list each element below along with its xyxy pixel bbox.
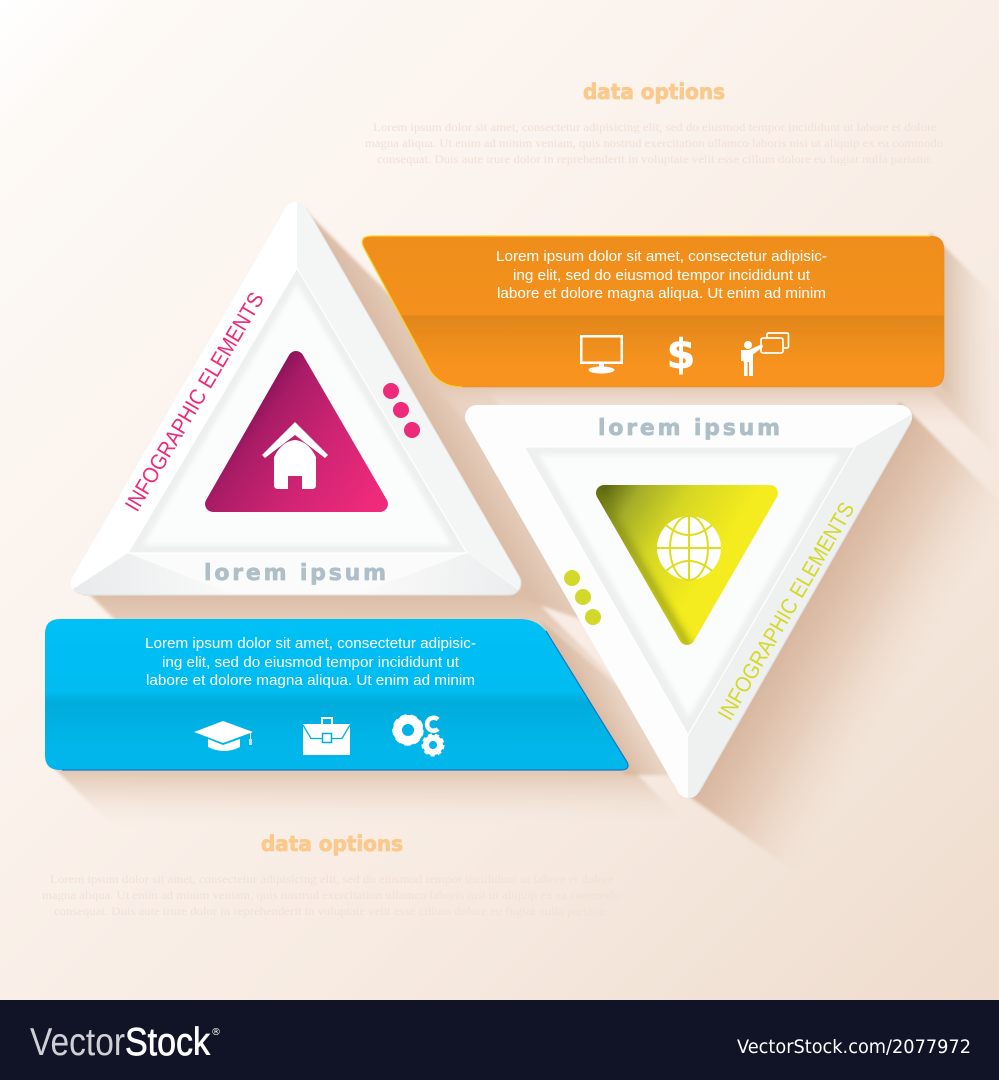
blue banner text: labore et dolore magna aliqua. Ut enim ad minim — [146, 672, 475, 689]
paragraph top: magna aliqua. Ut enim ad minim veniam, quis nostrud exercitation ullamco laboris nisi ut aliquip ex ea commodo — [365, 136, 943, 150]
icon: gears — [394, 716, 443, 755]
footer logo stock: Stock — [125, 1021, 210, 1064]
top text block — [365, 80, 943, 166]
paragraph bottom — [42, 872, 621, 918]
heading: data options top: data options — [583, 80, 725, 104]
icon: globe — [657, 516, 721, 580]
blue banner text: ing elit, sed do eiusmod tempor incididunt ut — [162, 654, 460, 671]
green dots — [564, 570, 601, 625]
inner plateau — [539, 455, 840, 717]
icon: graduation cap — [194, 721, 253, 751]
triangle body — [465, 405, 912, 798]
long shadows — [48, 205, 999, 900]
triangle body — [71, 202, 521, 595]
label: infographic elements pink: INFOGRAPHIC ELEMENTS — [120, 288, 269, 516]
paragraph bottom: consequat. Duis aute irure dolor in reprehenderit in voluptate velit esse cillum dolore eu fugiat nulla pariatur. — [54, 904, 609, 918]
orange banner text — [496, 248, 827, 302]
panel: orange banner — [362, 236, 944, 387]
footer url: VectorStock.com/2077972 — [737, 1036, 971, 1058]
footer logo vector: Vector — [30, 1021, 125, 1064]
orange banner text: labore et dolore magna aliqua. Ut enim ad minim — [497, 285, 826, 302]
paragraph bottom: magna aliqua. Ut enim ad minim veniam, quis nostrud exercitation ullamco laboris nisi ut aliquip ex ea commodo — [42, 888, 621, 902]
paragraph top: Lorem ipsum dolor sit amet, consectetur adipisicing elit, sed do eiusmod tempor incididunt ut labore et dolore — [373, 120, 937, 134]
panel: yellow triangle — [465, 405, 930, 815]
pink dots — [383, 383, 420, 438]
paragraph top — [365, 120, 943, 166]
footer bar — [0, 1000, 999, 1080]
magenta window — [205, 351, 388, 512]
blue banner text — [145, 635, 476, 689]
orange banner text: ing elit, sed do eiusmod tempor incididunt ut — [513, 267, 811, 284]
label: lorem ipsum top: lorem ipsum — [598, 416, 780, 441]
panel: blue banner — [45, 619, 628, 770]
icon: briefcase — [303, 718, 350, 755]
paragraph bottom: Lorem ipsum dolor sit amet, consectetur adipisicing elit, sed do eiusmod tempor incididunt ut labore et dolore — [50, 872, 614, 886]
icon: dollar: $ — [667, 330, 695, 378]
icon: presenter — [741, 333, 788, 376]
bottom text block — [42, 832, 621, 918]
orange banner text: Lorem ipsum dolor sit amet, consectetur adipisic- — [496, 248, 827, 265]
icon: house — [262, 422, 328, 489]
blue banner text: Lorem ipsum dolor sit amet, consectetur adipisic- — [145, 635, 476, 652]
label: lorem ipsum bottom: lorem ipsum — [204, 561, 386, 586]
icon: monitor — [580, 335, 623, 374]
yellow window — [596, 485, 778, 645]
paragraph top: consequat. Duis aute irure dolor in reprehenderit in voluptate velit esse cillum dolore eu fugiat nulla pariatur. — [377, 152, 933, 166]
inner plateau — [143, 284, 452, 545]
heading: data options bottom: data options — [261, 832, 403, 856]
footer registered mark: ® — [211, 1027, 221, 1038]
label: infographic elements green: INFOGRAPHIC ELEMENTS — [713, 498, 859, 725]
panel: magenta triangle — [71, 202, 522, 596]
